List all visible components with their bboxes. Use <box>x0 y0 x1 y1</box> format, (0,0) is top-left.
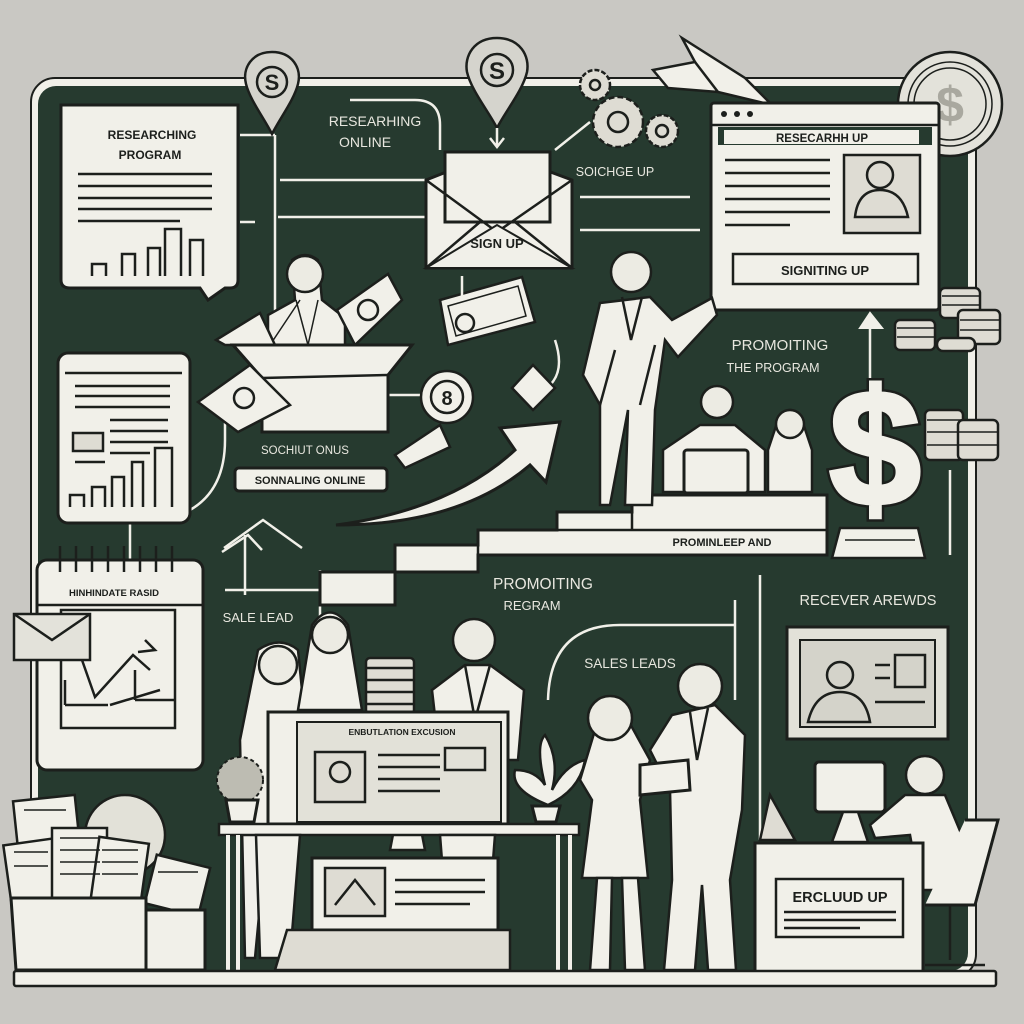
panel: browser window: SIGNITING UP <box>781 263 869 278</box>
small note <box>395 425 450 468</box>
steps <box>320 495 827 605</box>
arrow up <box>860 313 882 328</box>
plant right <box>514 735 585 822</box>
panel: calendar <box>37 546 203 770</box>
map pin center: S <box>489 58 505 85</box>
panel: desk sign <box>755 843 923 975</box>
panel: calendar: HINHINDATE RASID <box>69 588 159 599</box>
text: sign up label: SOICHGE UP <box>576 165 654 179</box>
text: promoting program <box>493 576 593 613</box>
floating bill <box>440 276 535 345</box>
heading: researching online: RESEARHING <box>329 113 421 129</box>
floor shelf <box>14 971 996 986</box>
text pill: sonaling online: SONNALING ONLINE <box>255 475 365 487</box>
small coin <box>421 371 473 423</box>
growth arrow <box>336 422 560 525</box>
panel: rewards screen <box>787 627 948 739</box>
monitor: ENBUTLATION EXCUSION <box>348 727 456 737</box>
coin top right: $ <box>936 77 964 133</box>
small coin: 8 <box>441 388 453 410</box>
dollar sign: $ <box>829 356 921 540</box>
text: promoting the program: PROMOITING <box>732 337 828 354</box>
text: sales leads: SALES LEADS <box>584 656 676 671</box>
map pin left: S <box>265 70 279 95</box>
text pill: sonaling online <box>235 468 387 491</box>
people at laptop <box>663 386 812 493</box>
text: label online: SOCHIUT ONUS <box>261 445 349 457</box>
panel: researching program <box>61 105 238 300</box>
panel: desk sign: ERCLUUD UP <box>792 890 888 906</box>
icon: envelope <box>14 614 90 660</box>
group of people <box>240 612 524 958</box>
icon: gears <box>580 70 678 147</box>
connector lines <box>130 100 950 840</box>
desk <box>219 824 579 970</box>
dollar sign: $ <box>829 356 921 540</box>
man presenting <box>583 252 717 505</box>
map pin left <box>245 52 299 134</box>
lower legs <box>256 835 495 958</box>
panel: browser window: RESECARHH UP <box>776 133 868 145</box>
envelope sign up <box>426 152 572 268</box>
money box bottom left <box>3 795 210 970</box>
plant left <box>217 757 263 822</box>
monitor <box>268 712 508 850</box>
coin top right <box>898 52 1002 156</box>
steps: PROMINLEEP AND <box>672 537 772 549</box>
second screen <box>275 858 510 970</box>
text: sale lead: SALE LEAD <box>223 610 293 625</box>
text: promoting the program <box>726 337 828 375</box>
panel: report <box>58 353 190 523</box>
icon: small chevron <box>222 520 302 595</box>
panel: researching program: RESEARCHING <box>108 128 196 142</box>
text: promoting the program: THE PROGRAM <box>726 361 820 375</box>
heading: online: ONLINE <box>339 134 391 150</box>
text: promoting program: REGRAM <box>503 598 561 613</box>
diamond badge <box>512 365 555 410</box>
icon: paper plane <box>653 38 772 105</box>
panel: browser window <box>711 103 939 310</box>
man at desk with computer <box>760 756 998 965</box>
text: promoting program: PROMOITING <box>493 576 593 593</box>
cash box with man <box>198 255 412 432</box>
envelope sign up: SIGN UP <box>470 236 524 251</box>
panel: researching program: PROGRAM <box>119 148 181 162</box>
coin stacks <box>895 288 1000 460</box>
woman and man with paper <box>580 664 745 970</box>
map pin center <box>466 38 528 147</box>
text: receiver rewards: RECEVER AREWDS <box>800 593 936 609</box>
